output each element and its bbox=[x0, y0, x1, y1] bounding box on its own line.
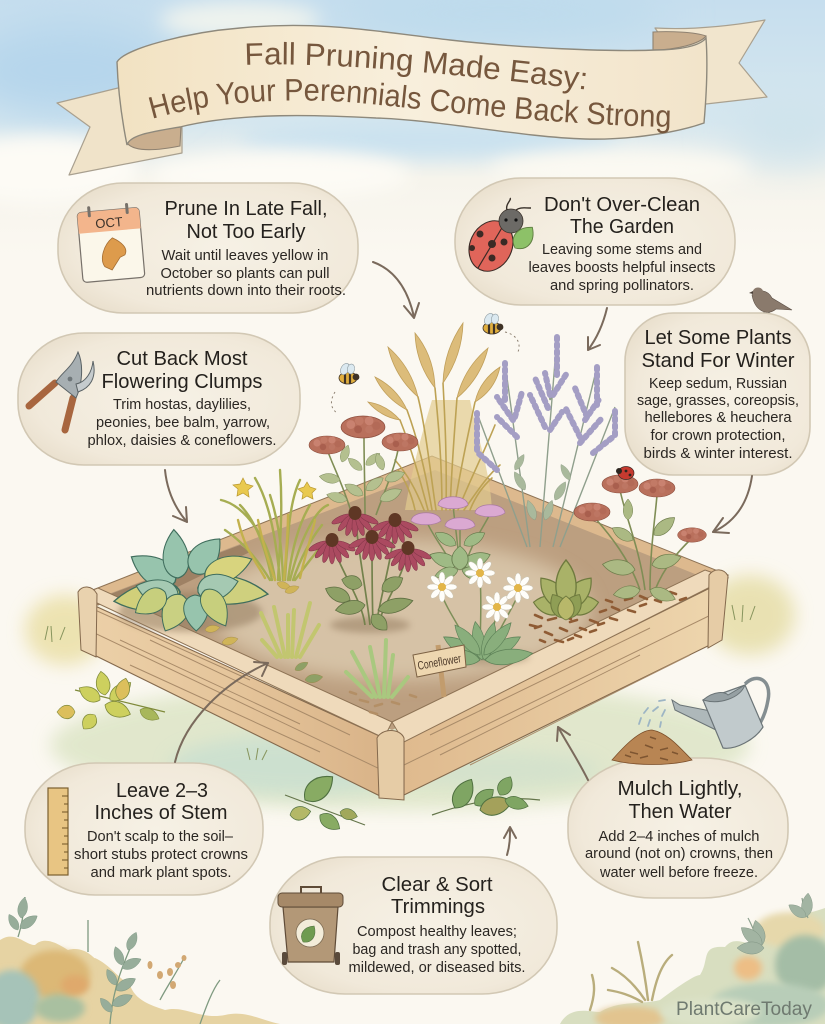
mulch pile bbox=[612, 730, 692, 764]
fallen leaves in bed bbox=[204, 580, 323, 684]
panel: clear and sort: bag and trash any spotted, bbox=[352, 941, 522, 958]
panel: don't over-clean: leaves boosts helpful insects bbox=[528, 259, 716, 276]
corner posts bbox=[78, 587, 97, 657]
heading: Leave 2–3 bbox=[116, 779, 208, 802]
icon: ruler bbox=[48, 788, 68, 875]
plant: purple bee balm bbox=[411, 497, 505, 583]
trimmings pile centre right bbox=[432, 773, 540, 818]
panel: prune in late fall bbox=[58, 183, 358, 313]
mulch patches bbox=[350, 592, 686, 714]
plant: coneflowers bbox=[308, 506, 432, 635]
left side board bbox=[82, 600, 384, 797]
body text: Trim hostas, daylilies, bbox=[113, 396, 251, 413]
panel: cut back clumps: Flowering Clumps bbox=[102, 370, 262, 393]
raised wooden bed bbox=[78, 456, 728, 800]
bee trails bbox=[331, 332, 519, 413]
plant label sign bbox=[413, 645, 466, 697]
arrow: stem to stubs bbox=[175, 662, 268, 762]
arrow: prune to bed bbox=[373, 262, 419, 318]
leaf pile left bbox=[57, 670, 165, 733]
panel: let some plants stand: Stand For Winter bbox=[642, 349, 795, 372]
foliage bottom right bbox=[560, 893, 825, 1024]
icon: bird bbox=[749, 288, 792, 317]
panel: clear and sort bbox=[270, 857, 557, 994]
icon: ladybug bbox=[461, 198, 539, 278]
panel: cut back clumps bbox=[18, 333, 300, 465]
panel: clear and sort: Trimmings bbox=[391, 895, 485, 918]
arrow: clumps to hosta bbox=[165, 470, 187, 522]
plant: red sedum back left bbox=[309, 416, 418, 515]
panel: mulch lightly: water well before freeze. bbox=[599, 864, 758, 881]
panel: cut back clumps: phlox, daisies & coneflowers. bbox=[88, 432, 276, 449]
banner ribbon bbox=[117, 25, 707, 145]
plant: daylily grass clump bbox=[221, 470, 335, 580]
plant label sign: Coneflower bbox=[416, 651, 462, 673]
plant: small succulent bbox=[532, 560, 600, 622]
trimmings pile centre left bbox=[285, 769, 365, 834]
body text: Add 2–4 inches of mulch bbox=[598, 828, 760, 845]
icon: calendar: OCT bbox=[95, 214, 123, 231]
left fold bbox=[127, 126, 181, 150]
plant: big ornamental grass bbox=[368, 323, 500, 510]
foliage bottom left bbox=[0, 896, 280, 1024]
title banner bbox=[56, 19, 768, 176]
panel: mulch lightly: around (not on) crowns, then bbox=[585, 845, 773, 862]
body text: Leaving some stems and bbox=[542, 241, 702, 258]
plant: hosta bbox=[112, 529, 269, 636]
heading: Cut Back Most bbox=[116, 347, 248, 370]
body text: Compost healthy leaves; bbox=[357, 923, 517, 940]
panel: cut back clumps: peonies, bee balm, yarrow, bbox=[96, 414, 270, 431]
plant: red sedum right bbox=[574, 466, 706, 605]
right fold bbox=[653, 32, 706, 50]
icon: bee left bbox=[339, 362, 359, 384]
panel: don't over-clean bbox=[455, 178, 735, 305]
heading: Prune In Late Fall, bbox=[164, 197, 328, 220]
heading: Don't Over-Clean bbox=[544, 193, 700, 216]
panel: let some plants stand bbox=[625, 313, 810, 475]
banner title text: Fall Pruning Made Easy: bbox=[246, 42, 586, 94]
plant: daisies bbox=[427, 558, 534, 667]
icon: compost bin bbox=[278, 887, 343, 965]
ladybug on sedum bbox=[616, 466, 634, 480]
panel: prune in late fall: nutrients down into their roots. bbox=[146, 282, 346, 299]
arrow: winter to sedum bbox=[713, 476, 752, 533]
body text: Don't scalp to the soil– bbox=[87, 828, 234, 845]
heading: Let Some Plants bbox=[644, 326, 792, 349]
arrow: clear to trimmings bbox=[504, 827, 516, 855]
ground wash around raised bed bbox=[25, 575, 795, 810]
icon: watering can bbox=[639, 678, 769, 748]
right side board bbox=[404, 580, 726, 795]
arrow: over-clean to lavender bbox=[588, 308, 607, 350]
left banner tail bbox=[57, 87, 182, 175]
water drops bbox=[639, 700, 665, 727]
right banner tail bbox=[655, 20, 767, 104]
panel: leave stem: short stubs protect crowns bbox=[74, 846, 248, 863]
panel: mulch lightly: Then Water bbox=[628, 800, 732, 823]
heading: Mulch Lightly, bbox=[618, 777, 742, 800]
body text: Wait until leaves yellow in bbox=[162, 247, 328, 264]
body text: Keep sedum, Russian bbox=[649, 375, 787, 392]
watermark: PlantCareToday bbox=[676, 999, 812, 1020]
panel: leave stem: Inches of Stem bbox=[94, 801, 228, 824]
icon: pruners bbox=[29, 352, 94, 430]
panel: let some plants stand: hellebores & heuchera bbox=[644, 409, 792, 426]
panel: mulch lightly bbox=[568, 758, 788, 898]
plant: cut stubs left bbox=[261, 603, 319, 657]
panel: don't over-clean: and spring pollinators. bbox=[550, 277, 694, 294]
panel: don't over-clean: The Garden bbox=[570, 215, 674, 238]
panel: leave stem bbox=[25, 763, 263, 895]
title banner: Help Your Perennials Come Back Strong bbox=[148, 79, 670, 134]
plant: lavender bbox=[477, 337, 615, 547]
panel: prune in late fall: October so plants can pull bbox=[160, 265, 330, 282]
back rim bbox=[80, 456, 728, 605]
top rims bbox=[80, 588, 392, 738]
icon: calendar bbox=[77, 203, 145, 283]
icon: bee right bbox=[483, 312, 503, 334]
panel: prune in late fall: Not Too Early bbox=[186, 220, 306, 243]
heading: Clear & Sort bbox=[382, 873, 493, 896]
panel: clear and sort: mildewed, or diseased bits. bbox=[348, 959, 526, 976]
soil bbox=[98, 470, 705, 730]
plant: cut stubs right bbox=[346, 640, 408, 697]
panel: let some plants stand: for crown protection, bbox=[650, 427, 786, 444]
panel: let some plants stand: birds & winter interest. bbox=[644, 445, 792, 462]
arrow: mulch to bed bbox=[557, 727, 588, 780]
panel: let some plants stand: sage, grasses, coreopsis, bbox=[637, 392, 799, 409]
panel: leave stem: and mark plant spots. bbox=[90, 864, 232, 881]
